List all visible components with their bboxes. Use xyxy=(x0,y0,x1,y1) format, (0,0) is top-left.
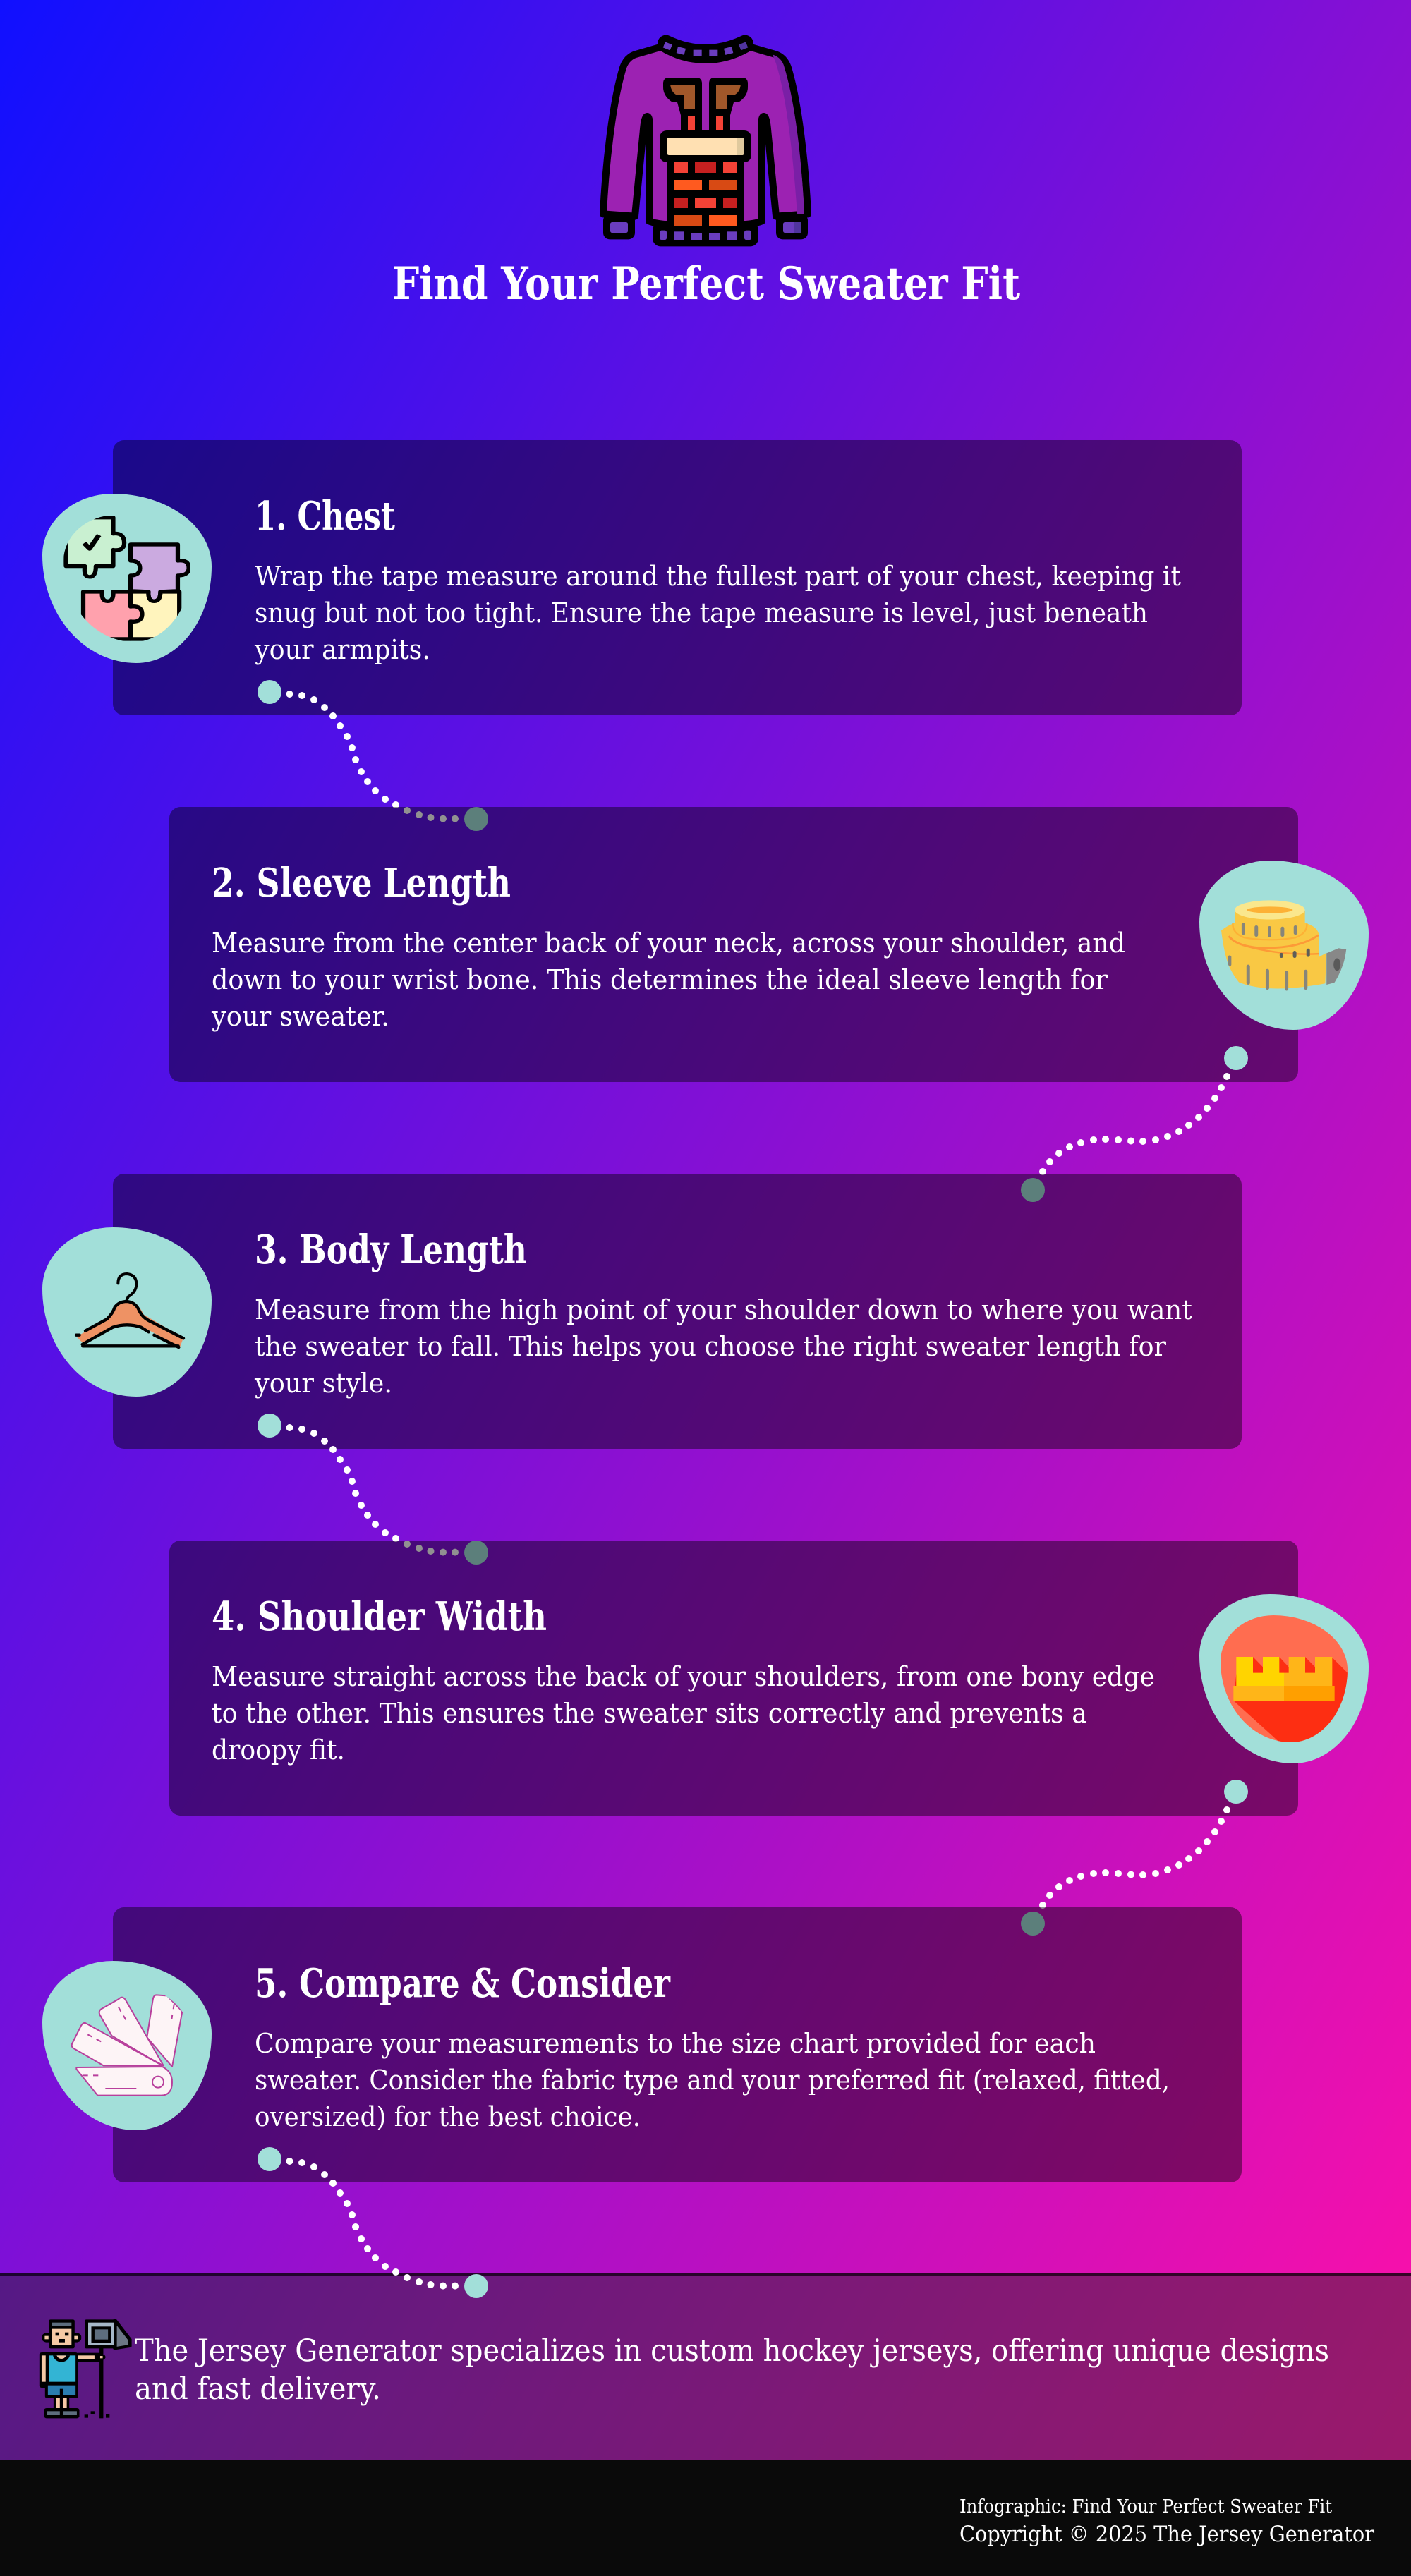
text block: body length: the sweater to fall. This helps you choose the right sweater length for xyxy=(255,1331,1167,1362)
icon: hanger in blob xyxy=(42,1227,212,1397)
icon: ruler blocks in blob xyxy=(1199,1594,1369,1763)
text: copyright: Copyright © 2025 The Jersey Generator xyxy=(959,2522,1374,2547)
text block: body length: Measure from the high point of your shoulder down to where you want xyxy=(255,1294,1192,1325)
icon: puzzle pieces in blob xyxy=(42,494,212,663)
panel: step 5 compare and consider xyxy=(42,1907,1242,2182)
arrow: connector step 1 to 2 xyxy=(258,680,488,831)
panel: step 3 body length xyxy=(42,1174,1242,1449)
heading: compare and consider: 5. Compare & Consider xyxy=(255,1960,671,2007)
text block: shoulder width: to the other. This ensures the sweater sits correctly and prevents a xyxy=(212,1698,1087,1729)
icon: sweater with chimney xyxy=(603,42,808,246)
title: Find Your Perfect Sweater Fit xyxy=(392,257,1020,310)
arrow: connector step 4 to 5 xyxy=(1021,1780,1248,1936)
text block: compare and consider: Compare your measurements to the size chart provided for each xyxy=(255,2028,1096,2059)
arrow: connector step 5 to footer xyxy=(258,2147,488,2298)
text block: sleeve length: Measure from the center back of your neck, across your shoulder, and xyxy=(212,928,1125,959)
text block: chest xyxy=(254,561,1181,665)
text block: sleeve length xyxy=(211,928,1125,1032)
text block: body length xyxy=(254,1294,1192,1399)
panel: step 1 chest xyxy=(42,440,1242,715)
text block: shoulder width xyxy=(212,1661,1155,1766)
heading: chest: 1. Chest xyxy=(255,493,395,540)
text block: chest: your armpits. xyxy=(254,634,430,665)
text block: chest: snug but not too tight. Ensure the tape measure is level, just beneath xyxy=(255,597,1148,628)
text block: compare and consider: oversized) for the best choice. xyxy=(255,2101,641,2132)
text block: company blurb: and fast delivery. xyxy=(135,2371,381,2407)
text block: chest: Wrap the tape measure around the fullest part of your chest, keeping it xyxy=(255,561,1181,592)
panel: footer company band xyxy=(0,2273,1411,2460)
text block: sleeve length: down to your wrist bone. This determines the ideal sleeve length for xyxy=(212,964,1108,995)
text block: company blurb: The Jersey Generator specializes in custom hockey jerseys, offering unique designs xyxy=(135,2333,1329,2369)
text: infographic credit: Infographic: Find Your Perfect Sweater Fit xyxy=(959,2496,1333,2517)
text block: company blurb xyxy=(135,2333,1329,2407)
text block: compare and consider xyxy=(255,2028,1170,2132)
text block: body length: your style. xyxy=(254,1368,392,1399)
heading: body length: 3. Body Length xyxy=(255,1227,527,1273)
icon: person holding sign xyxy=(40,2319,130,2418)
text block: shoulder width: droopy fit. xyxy=(212,1734,345,1766)
panel: step 2 sleeve length xyxy=(169,807,1369,1082)
icon: fabric swatches in blob xyxy=(42,1961,212,2130)
text block: compare and consider: sweater. Consider the fabric type and your preferred fit (relaxed, fitted, xyxy=(255,2065,1170,2096)
icon: tape measure in blob xyxy=(1199,861,1369,1030)
text block: shoulder width: Measure straight across the back of your shoulders, from one bony edge xyxy=(212,1661,1155,1692)
panel: black footer xyxy=(0,2460,1411,2576)
panel: step 4 shoulder width xyxy=(169,1541,1369,1816)
heading: sleeve length: 2. Sleeve Length xyxy=(212,860,511,906)
heading: shoulder width: 4. Shoulder Width xyxy=(212,1593,547,1640)
text block: sleeve length: your sweater. xyxy=(211,1001,389,1032)
arrow: connector step 3 to 4 xyxy=(258,1414,488,1565)
arrow: connector step 2 to 3 xyxy=(1021,1046,1248,1202)
